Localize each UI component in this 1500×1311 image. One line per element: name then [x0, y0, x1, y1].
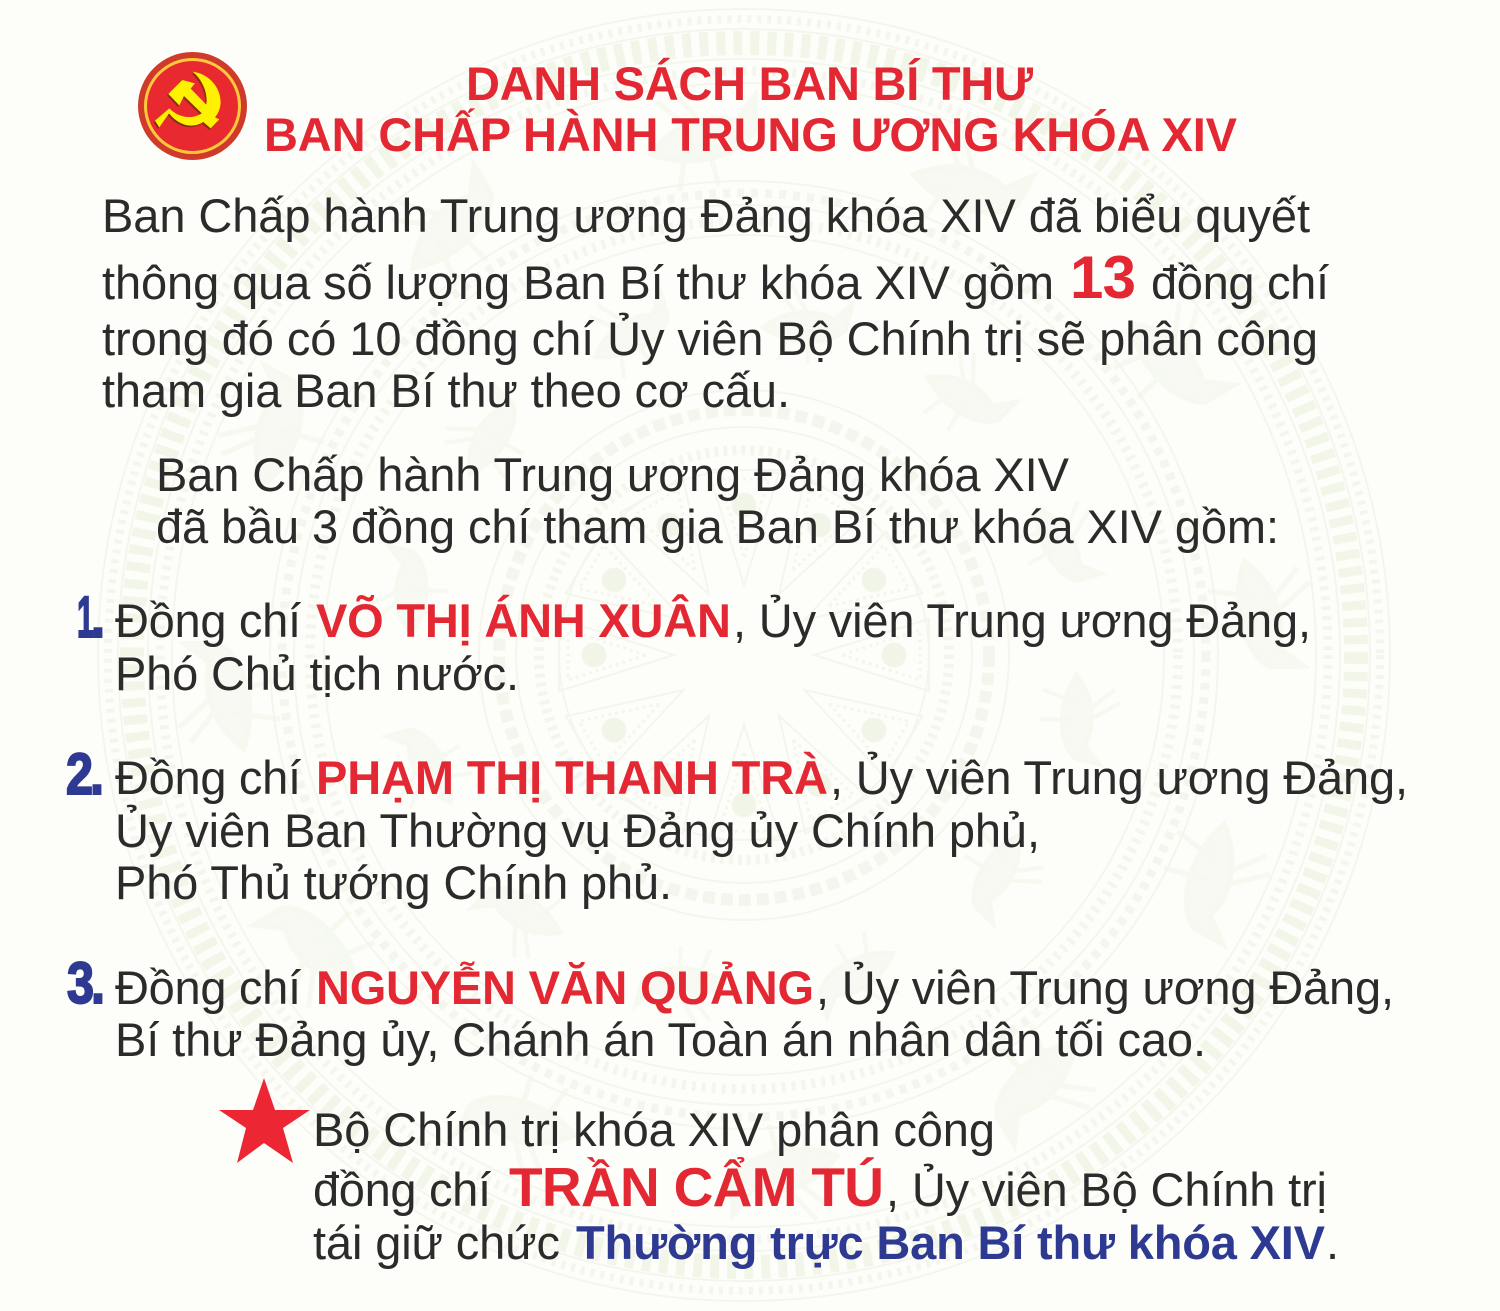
- number 2: .: [90, 742, 104, 807]
- member 1: , Ủy viên Trung ương Đảng,: [733, 594, 1311, 647]
- member 1: VÕ THỊ ÁNH XUÂN: [316, 594, 731, 647]
- title: DANH SÁCH BAN BÍ THƯ: [466, 57, 1033, 110]
- title: [264, 57, 1238, 161]
- member 3: NGUYỄN VĂN QUẢNG: [316, 961, 814, 1014]
- standing member note: Bộ Chính trị khóa XIV phân công: [313, 1103, 995, 1156]
- member 3: , Ủy viên Trung ương Đảng,: [816, 961, 1394, 1014]
- standing member note: .: [1326, 1216, 1339, 1269]
- intro paragraph: Ban Chấp hành Trung ương Đảng khóa XIV đã biểu quyết: [102, 189, 1310, 242]
- number 1: 1: [77, 585, 94, 650]
- intro paragraph: thông qua số lượng Ban Bí thư khóa XIV gồm: [102, 256, 1054, 309]
- election statement: đã bầu 3 đồng chí tham gia Ban Bí thư khóa XIV gồm:: [156, 500, 1279, 553]
- member 3: Đồng chí: [115, 961, 301, 1014]
- number 3: .: [91, 951, 105, 1016]
- member 2: Đồng chí: [115, 751, 301, 804]
- standing member note: TRẦN CẨM TÚ: [509, 1156, 884, 1218]
- intro paragraph: trong đó có 10 đồng chí Ủy viên Bộ Chính trị sẽ phân công: [102, 312, 1318, 365]
- number 2: 2: [66, 742, 93, 807]
- intro paragraph: [102, 189, 1329, 417]
- member 2: PHẠM THỊ THANH TRÀ: [316, 751, 828, 804]
- intro paragraph: đồng chí: [1151, 256, 1329, 309]
- election statement: Ban Chấp hành Trung ương Đảng khóa XIV: [156, 448, 1070, 501]
- number 3: 3: [67, 951, 94, 1016]
- member 3: [67, 951, 1394, 1066]
- intro paragraph: 13: [1070, 244, 1136, 311]
- standing member note: , Ủy viên Bộ Chính trị: [886, 1163, 1327, 1216]
- member 2: [66, 742, 1408, 909]
- member 2: Phó Thủ tướng Chính phủ.: [115, 856, 672, 909]
- member 2: , Ủy viên Trung ương Đảng,: [830, 751, 1408, 804]
- intro paragraph: tham gia Ban Bí thư theo cơ cấu.: [102, 364, 790, 417]
- standing member note: [313, 1103, 1339, 1269]
- election statement: [156, 448, 1279, 553]
- member 1: Đồng chí: [115, 594, 301, 647]
- member 3: Bí thư Đảng ủy, Chánh án Toàn án nhân dân tối cao.: [115, 1013, 1206, 1066]
- member 1: [77, 585, 1311, 700]
- standing member note: tái giữ chức: [313, 1216, 560, 1269]
- standing member note: Thường trực Ban Bí thư khóa XIV: [576, 1216, 1326, 1269]
- icon: red star: [219, 1078, 310, 1163]
- number 1: .: [91, 585, 105, 650]
- member 1: Phó Chủ tịch nước.: [115, 647, 519, 700]
- title: BAN CHẤP HÀNH TRUNG ƯƠNG KHÓA XIV: [264, 108, 1238, 161]
- icon: party emblem hammer and sickle: [138, 52, 247, 160]
- member 2: Ủy viên Ban Thường vụ Đảng ủy Chính phủ,: [115, 804, 1040, 857]
- standing member note: đồng chí: [313, 1163, 491, 1216]
